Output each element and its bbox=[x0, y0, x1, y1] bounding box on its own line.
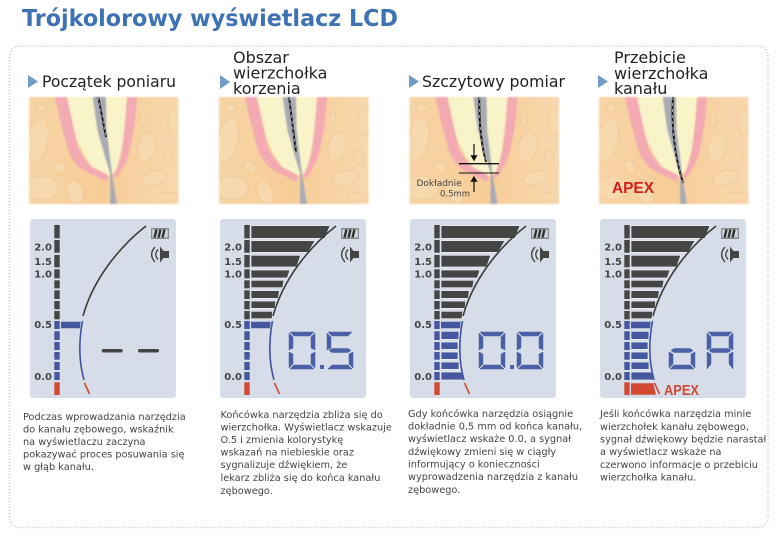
LCD display: oA with APEX warning: 1.0 bbox=[604, 270, 622, 281]
LCD display: 0.5: 0.0 bbox=[224, 372, 242, 383]
LCD display: oA with APEX warning: 0.5 bbox=[604, 320, 622, 331]
description: lekarz zbliża się do końca kanału bbox=[220, 472, 380, 484]
description: na wyświetlaczu zaczyna bbox=[23, 436, 146, 448]
LCD display: oA with APEX warning: 1.5 bbox=[604, 257, 622, 268]
description: O.5 i zmienia kolorystykę bbox=[220, 435, 343, 446]
illustration: tooth with file entering canal bbox=[24, 97, 180, 206]
illustration: file near apex bbox=[214, 97, 370, 206]
description: Podczas wprowadzania narzędzia bbox=[23, 412, 186, 423]
LCD display: 0.0: 2.0 bbox=[414, 242, 432, 254]
panel: obszar wierzchołka korzenia bbox=[214, 48, 392, 497]
description: sygnalizuje dźwiękiem, że bbox=[220, 459, 347, 471]
title: Trójkolorowy wyświetlacz LCD bbox=[22, 6, 398, 32]
label: dokładnie 0.5mm: Dokładnie bbox=[416, 179, 462, 189]
panel: przebicie wierzchołka kanału bbox=[594, 48, 766, 484]
description: Gdy końcówka narzędzia osiągnie bbox=[408, 408, 573, 420]
LCD display: no reading bbox=[30, 219, 176, 398]
illustration: file at measurement point bbox=[405, 97, 560, 206]
LCD display: oA with APEX warning: APEX bbox=[664, 382, 699, 399]
LCD display: oA with APEX warning: 0.0 bbox=[604, 372, 622, 383]
LCD display: oA with APEX warning bbox=[600, 219, 746, 399]
illustration: file past apex bbox=[594, 97, 750, 206]
heading: obszar wierzchołka korzenia bbox=[220, 48, 327, 98]
heading: obszar wierzchołka korzenia: Obszar bbox=[233, 48, 289, 67]
LCD display: no reading: 1.0 bbox=[34, 270, 52, 281]
heading: przebicie wierzchołka kanału bbox=[598, 48, 708, 98]
LCD display: 0.0: 0.0 bbox=[414, 372, 432, 383]
LCD display: no reading: 0.5 bbox=[34, 320, 52, 331]
LCD display: 0.0: 1.0 bbox=[414, 270, 432, 281]
description: Jeśli końcówka narzędzia minie bbox=[599, 408, 751, 420]
LCD display: 0.5: 2.0 bbox=[224, 242, 242, 254]
LCD display: no reading: 2.0 bbox=[34, 242, 52, 254]
heading: szczytowy pomiar: Szczytowy pomiar bbox=[422, 72, 565, 91]
description: pokazywać proces posuwania się bbox=[23, 448, 185, 460]
description: wyświetlacz wskaże 0.0, a sygnał bbox=[408, 433, 571, 445]
description: dźwiękowy zmieni się w ciągły bbox=[408, 446, 556, 458]
LCD display: 0.5 bbox=[220, 219, 366, 398]
LCD display: 0.0: 1.5 bbox=[414, 257, 432, 268]
label: dokładnie 0.5mm: 0.5mm bbox=[440, 190, 470, 200]
description: a wyświetlacz wskaże na bbox=[600, 446, 722, 458]
heading: początek poniaru: Początek poniaru bbox=[42, 72, 176, 91]
panel: szczytowy pomiar bbox=[405, 72, 582, 496]
description: wyprowadzenia narzędzia z kanału bbox=[408, 472, 578, 483]
LCD display: 0.5: 1.0 bbox=[224, 270, 242, 281]
LCD display: 0.0 bbox=[410, 219, 556, 398]
description: wierzchołek kanału zębowego, bbox=[600, 422, 749, 433]
measurement marks bbox=[459, 144, 499, 192]
description: dokładnie 0,5 mm od końca kanału, bbox=[408, 420, 582, 432]
LCD display: oA with APEX warning: 2.0 bbox=[604, 242, 622, 254]
LCD display: 0.0: 0.5 bbox=[414, 320, 432, 331]
LCD display: no reading: 1.5 bbox=[34, 257, 52, 268]
heading: przebicie wierzchołka kanału: kanału bbox=[614, 79, 667, 98]
description: informujący o konieczności bbox=[408, 458, 540, 470]
description: Końcówka narzędzia zbliża się do bbox=[220, 409, 383, 421]
heading: przebicie wierzchołka kanału: wierzchołka bbox=[614, 64, 708, 83]
heading: obszar wierzchołka korzenia: wierzchołka bbox=[233, 64, 327, 82]
label: APEX: APEX bbox=[612, 180, 654, 197]
heading: obszar wierzchołka korzenia: korzenia bbox=[233, 79, 301, 98]
description: czerwono informacje o przebiciu bbox=[600, 460, 758, 471]
description: wskazań na niebieskie oraz bbox=[220, 446, 354, 458]
LCD display: no reading: 0.0 bbox=[34, 372, 52, 383]
description: zębowego. bbox=[220, 486, 273, 497]
description: do kanału zębowego, wskaźnik bbox=[23, 424, 174, 436]
description: zębowego. bbox=[408, 485, 460, 496]
description: w głąb kanału. bbox=[23, 462, 94, 473]
description: wierzchołka. Wyświetlacz wskazuje bbox=[220, 422, 392, 434]
description: sygnał dźwiękowy będzie narastał bbox=[600, 434, 766, 446]
LCD display: 0.5: 1.5 bbox=[224, 257, 242, 268]
panel: początek poniaru bbox=[23, 72, 186, 473]
LCD display: 0.5: 0.5 bbox=[224, 320, 242, 331]
description: wierzchołka kanału. bbox=[600, 472, 696, 484]
heading: przebicie wierzchołka kanału: Przebicie bbox=[614, 48, 686, 67]
